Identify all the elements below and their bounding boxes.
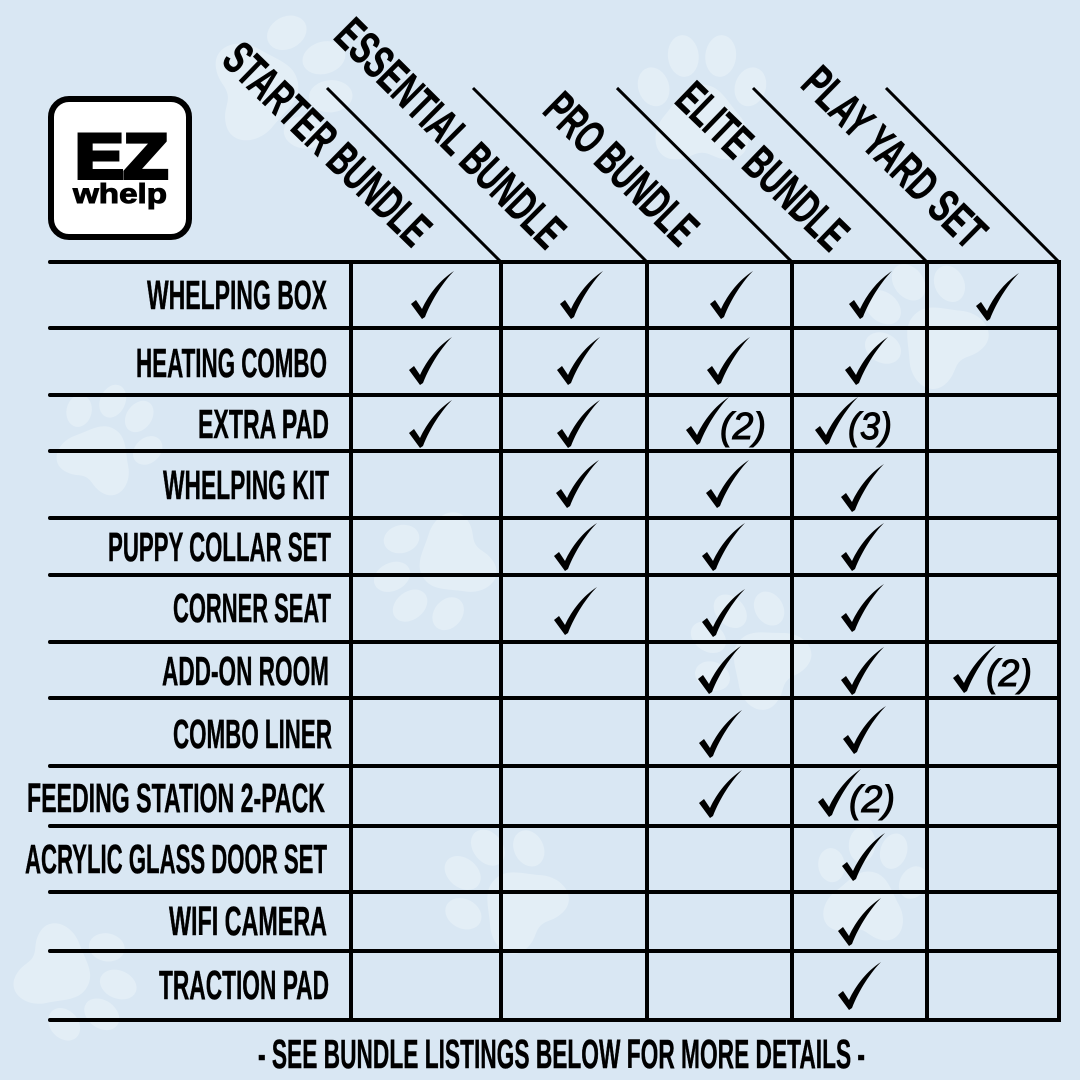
label: Combo Liner: COMBO LINER bbox=[173, 711, 332, 757]
column: Elite checks bbox=[815, 271, 892, 1010]
quantity: Pro extra pad x2: (2) bbox=[720, 406, 766, 448]
label: Acrylic Glass Door Set: ACRYLIC GLASS DOOR SET bbox=[25, 836, 327, 882]
column: Play Yard checks bbox=[953, 273, 1019, 693]
header: Elite Bundle: ELITE BUNDLE bbox=[666, 71, 860, 261]
label: Whelping Box: WHELPING BOX bbox=[147, 272, 327, 318]
header: Essential Bundle: ESSENTIAL BUNDLE bbox=[325, 8, 576, 258]
label: Add-On Room: ADD-ON ROOM bbox=[162, 648, 329, 694]
label: Traction Pad: TRACTION PAD bbox=[159, 962, 329, 1008]
header: Starter Bundle: STARTER BUNDLE bbox=[213, 31, 442, 256]
label: Feeding Station 2-Pack: FEEDING STATION 2-PACK bbox=[27, 775, 325, 821]
label: WiFi Camera: WIFI CAMERA bbox=[169, 898, 327, 944]
check marks bbox=[409, 271, 1019, 1010]
quantity: Play yard add-on room x2: (2) bbox=[986, 653, 1032, 695]
quantity: Elite feeding station x2: (2) bbox=[849, 779, 895, 821]
label: Extra Pad: EXTRA PAD bbox=[198, 401, 329, 447]
logo: EZ whelp bbox=[51, 99, 189, 237]
label: Corner Seat: CORNER SEAT bbox=[173, 585, 331, 631]
label: Whelping Kit: WHELPING KIT bbox=[163, 462, 329, 508]
quantity notes bbox=[720, 406, 1032, 821]
logo: EZ whelp: whelp bbox=[72, 178, 167, 209]
column: Pro checks bbox=[686, 271, 753, 818]
label: Heating Combo: HEATING COMBO bbox=[136, 340, 327, 386]
column: Essential checks bbox=[554, 271, 603, 635]
row labels bbox=[25, 272, 332, 1008]
quantity: Elite extra pad x3: (3) bbox=[848, 406, 892, 448]
header: Pro Bundle: PRO BUNDLE bbox=[534, 81, 709, 255]
logo: EZ whelp: EZ bbox=[75, 122, 168, 192]
column: Starter checks bbox=[409, 271, 454, 448]
label: Puppy Collar Set: PUPPY COLLAR SET bbox=[108, 524, 331, 570]
column headers bbox=[213, 8, 998, 261]
